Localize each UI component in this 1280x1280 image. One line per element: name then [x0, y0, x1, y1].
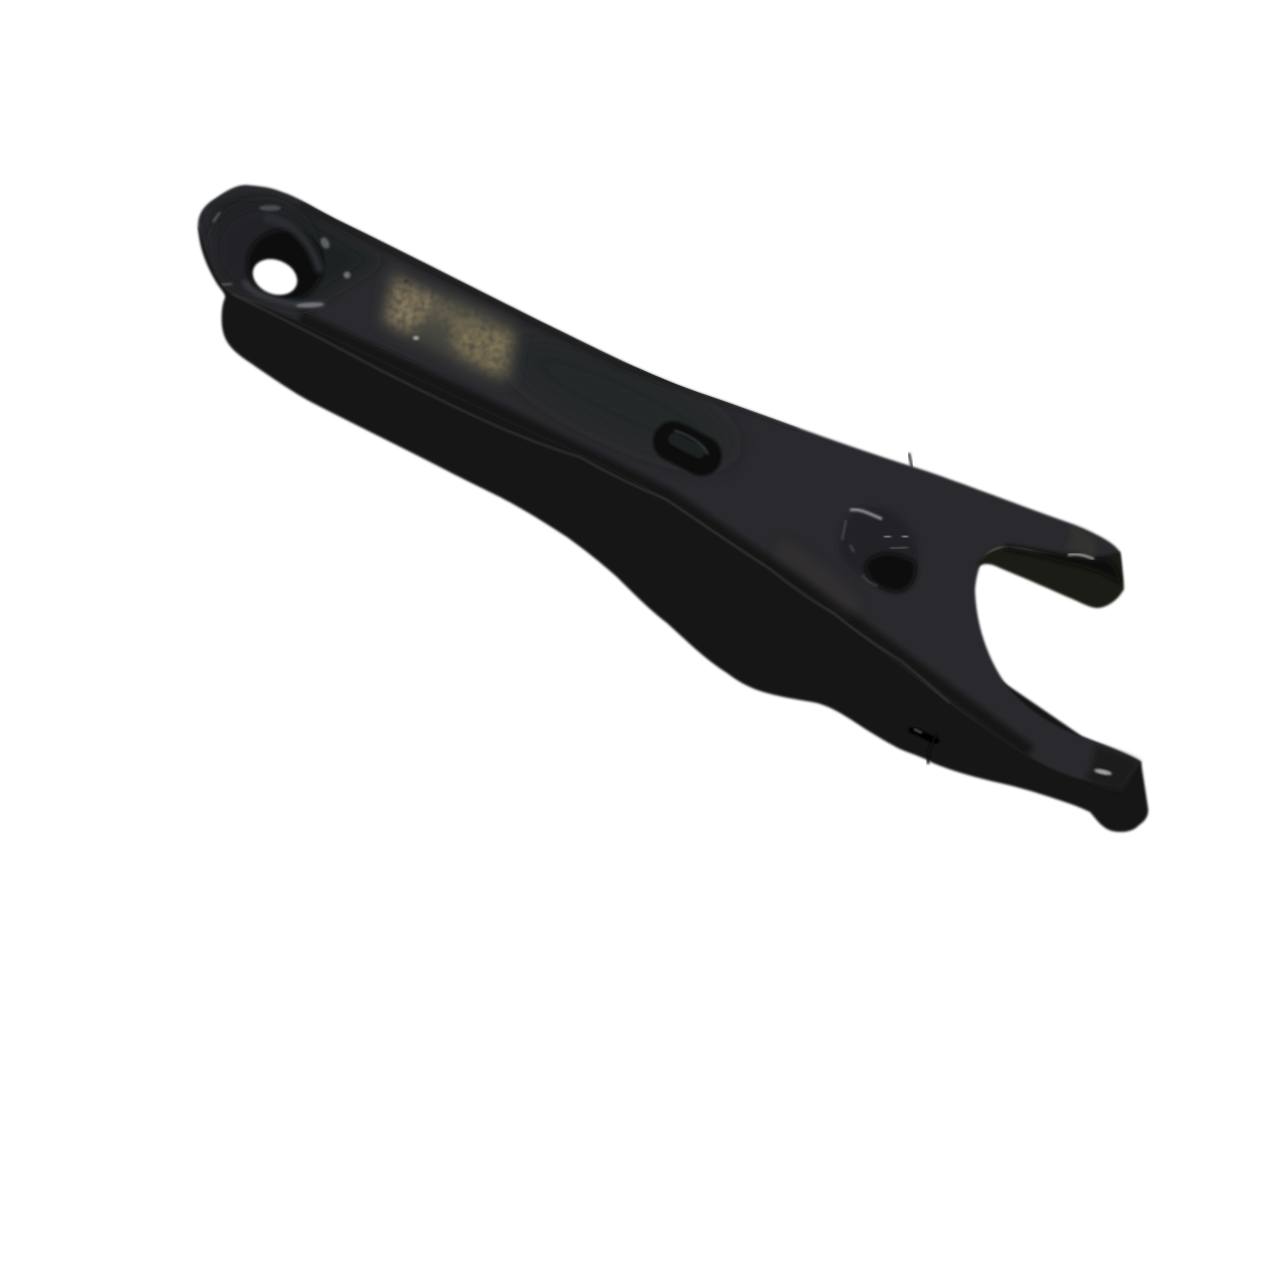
- panel: product photo: [196, 183, 1150, 834]
- upper prong wear pad: [1066, 525, 1096, 559]
- retaining clip on lower edge: [912, 729, 937, 764]
- cup highlights: [259, 205, 281, 211]
- lower prong wear pad: [1085, 745, 1140, 790]
- fork underside body: [198, 226, 1148, 832]
- bump highlights: [850, 510, 882, 519]
- upper fork prong thickness: [977, 545, 1124, 608]
- mounting hole cup: [212, 204, 350, 308]
- oval slot: [646, 414, 729, 483]
- through hole: [251, 257, 299, 297]
- top plate shading: [210, 196, 1030, 752]
- small pin at top edge: [909, 453, 912, 468]
- fork top plate: [198, 185, 1141, 787]
- worn metal glare patch: [380, 270, 518, 383]
- pressed bump: [838, 507, 919, 592]
- raised ridge line: [232, 294, 950, 703]
